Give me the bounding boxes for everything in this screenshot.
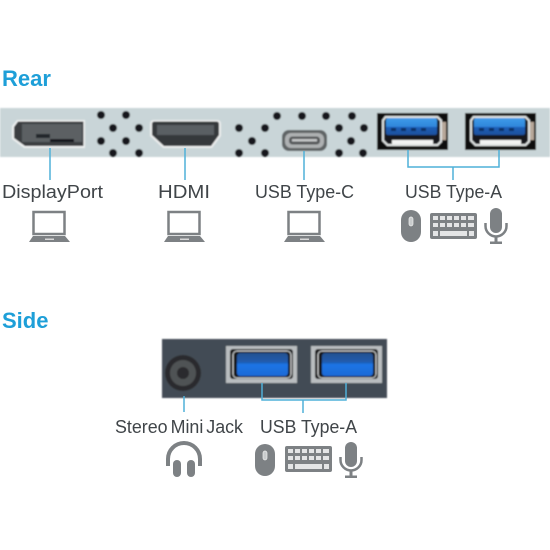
port: side USB Type-A 1 <box>226 346 297 383</box>
vent holes <box>97 111 368 157</box>
icon: mouse rear <box>401 210 421 242</box>
port: side USB Type-A 2 <box>311 346 382 383</box>
label: Stereo Mini Jack: Stereo Mini Jack <box>115 417 244 437</box>
icon: microphone side <box>340 442 362 478</box>
icon: laptop DisplayPort <box>29 212 70 242</box>
label: DisplayPort: DisplayPort <box>2 181 103 202</box>
connector lines: side <box>184 383 346 413</box>
port: USB Type-A 2 <box>465 113 536 150</box>
heading: Side: Side <box>2 308 48 333</box>
heading: Rear: Rear <box>2 66 51 91</box>
icon: mouse side <box>255 444 275 476</box>
icon: laptop HDMI <box>164 212 205 242</box>
label: side USB Type-A: USB Type-A <box>260 416 358 437</box>
icon: laptop USB Type-C <box>284 212 325 242</box>
icon: keyboard rear <box>430 213 477 239</box>
panel: rear port strip <box>0 108 550 157</box>
panel: side port strip <box>162 339 387 398</box>
connector lines: rear <box>50 148 499 180</box>
icon: headphones <box>168 443 200 477</box>
label: USB Type-C: USB Type-C <box>255 181 354 202</box>
label: HDMI: HDMI <box>158 181 210 202</box>
port: USB Type-C <box>282 130 327 151</box>
icon: microphone rear <box>486 208 506 244</box>
port: stereo mini jack <box>165 355 201 391</box>
icon: keyboard side <box>285 446 332 472</box>
label: USB Type-A: USB Type-A <box>405 181 503 202</box>
port: DisplayPort <box>12 120 85 148</box>
port: USB Type-A 1 <box>377 113 448 150</box>
port: HDMI <box>150 120 221 148</box>
